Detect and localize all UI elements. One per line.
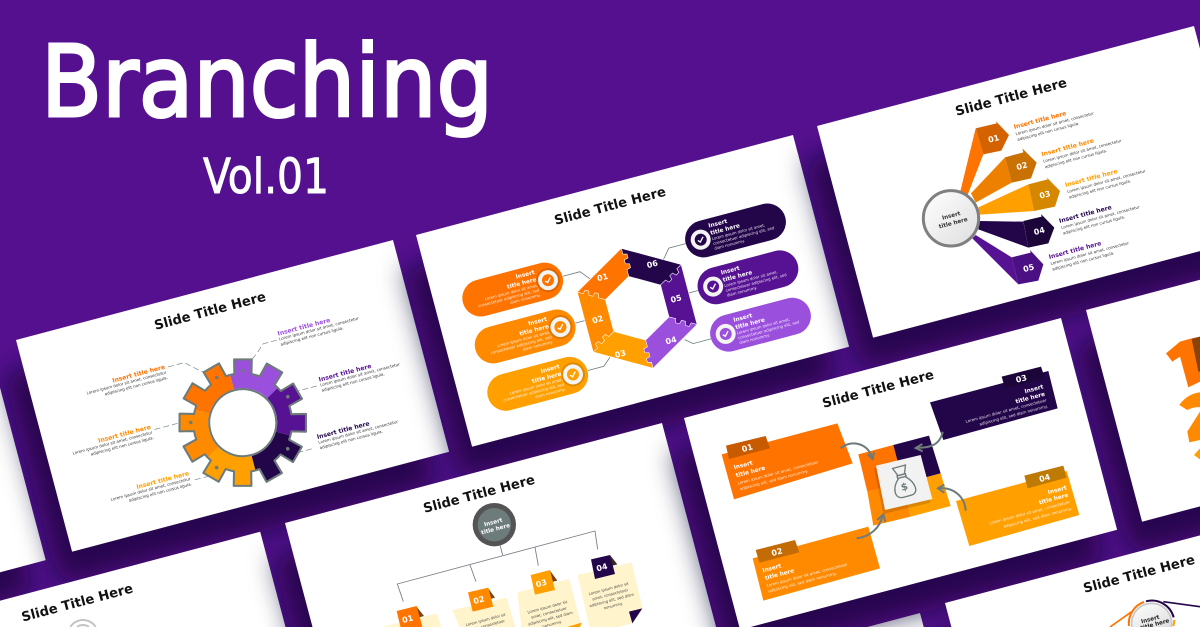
block 01: adipiscing elit, sed diam nonummy. [739, 468, 809, 491]
note 03: Lorem ipsum dolor sit [527, 599, 568, 615]
text block: gear label 6: Insert title here [316, 420, 370, 441]
block 02: 02 [770, 546, 784, 558]
heading: bottom-left slide title: Slide Title Here [20, 581, 135, 625]
centre quadrant square [858, 436, 951, 526]
text block: arrow label 4: adipiscing elit non cursus ligula. [1062, 214, 1125, 236]
pill 1 [458, 258, 567, 321]
text block: arrow label 2: Lorem ipsum dolor sit amet, consectetur [1043, 138, 1123, 164]
pill 6: diam nonummy. [714, 238, 745, 251]
hexagon numbers: 01 [596, 272, 610, 283]
org chart lines [397, 531, 598, 602]
pill 5: Lorem ipsum dolor sit amet, [724, 269, 778, 288]
text block: arrow label 3: Insert title here [1064, 168, 1118, 189]
panel: radial arrows slide [817, 26, 1200, 338]
icon: money bag [889, 464, 917, 499]
text block: gear label 1 [84, 364, 169, 401]
connector lines [563, 244, 711, 371]
panel: bottom-right slide [945, 503, 1200, 627]
icon: grey ring [70, 620, 96, 627]
pill 4: consectetuer adipiscing elit, sed [737, 319, 800, 340]
big number 2 [1179, 392, 1200, 442]
arrow 01 [960, 121, 1009, 196]
pill 2: Lorem ipsum dolor sit amet, [497, 329, 551, 348]
arrow to centre from 01 [841, 443, 874, 459]
pill 2: consectetuer adipiscing elit, sed [490, 334, 553, 355]
panel: big numbers slide (cropped) [1086, 210, 1200, 522]
pill 2: title here [519, 324, 550, 338]
pill 1: diam nonummy. [510, 292, 541, 305]
centre circle with coloured arcs [1129, 601, 1174, 627]
subtitle: Vol.01 [203, 149, 329, 205]
text block: gear label 4: Insert title here [277, 317, 331, 338]
text block: gear label 5 [318, 356, 402, 393]
note 04: adipiscing elit, sed diam [589, 591, 635, 608]
pill 4: title here [735, 318, 766, 331]
pill 6 [681, 199, 790, 262]
pill 3 [483, 353, 592, 415]
block 03 [930, 367, 1058, 440]
text block: gear label 6: adipiscing elit non cursus ligula. [319, 429, 383, 450]
note 02: 02 [472, 594, 486, 606]
pill 1: title here [507, 277, 537, 291]
panel: gear slide [16, 240, 449, 552]
note 04: nonummy. [603, 601, 623, 611]
pill 4 [706, 294, 815, 356]
text block: gear label 5: Insert title here [318, 363, 372, 384]
gear leader lines [140, 331, 332, 487]
pill 3: consectetuer adipiscing elit, sed [503, 381, 565, 403]
pill 4: Lorem ipsum dolor sit amet, [736, 317, 790, 335]
pill 1: Insert [515, 270, 536, 281]
text block: arrow label 5: Lorem ipsum dolor sit amet, consectetur [1050, 240, 1130, 266]
note 03: amet, consectetuer [530, 605, 568, 620]
arrow 03: 03 [1038, 189, 1052, 201]
pill 5: title here [722, 270, 753, 284]
panel: org chart slide [285, 423, 716, 627]
big number 1 [1166, 337, 1200, 387]
pill 6: Lorem ipsum dolor sit amet, [711, 222, 766, 241]
pill 5 [693, 246, 802, 308]
pill 1: consectetuer adipiscing elit, sed [478, 287, 540, 308]
block 03: Lorem ipsum dolor sit amet, consectetuer [965, 397, 1047, 424]
panel: money flow slide [684, 318, 1117, 627]
heading: money slide title: Slide Title Here [821, 368, 936, 412]
chart: six-part gear [146, 329, 340, 517]
heading: org chart title: Slide Title Here [422, 473, 537, 517]
heading: bottom-right slide title: Slide Title Here [1082, 553, 1197, 597]
main title: Branching [41, 25, 493, 140]
text block: gear label 3 [109, 470, 193, 507]
text block: gear label 3: Lorem ipsum dolor sit amet, consectetur [110, 476, 191, 502]
pill 3: Insert [540, 364, 561, 375]
text block: gear label 5: Lorem ipsum dolor sit amet, consectetur [320, 361, 401, 387]
text block: gear label 4: Lorem ipsum dolor sit amet, consectetur [278, 315, 360, 341]
block 04: title here [1038, 493, 1069, 506]
block 03: Insert [1024, 384, 1044, 395]
note 04: Lorem ipsum dolor sit [588, 581, 630, 596]
heading: radial slide title: Slide Title Here [954, 76, 1069, 120]
text block: arrow label 4: Lorem ipsum dolor sit amet, consectetur [1061, 204, 1141, 230]
text block: gear label 2: Lorem ipsum dolor sit amet, consectetur [72, 430, 153, 456]
block 01 [722, 423, 853, 499]
pill 4: diam nonummy. [739, 332, 770, 345]
block 01: Lorem ipsum dolor sit amet, consectetuer [737, 459, 819, 486]
note 04 [578, 555, 643, 627]
block 02: Insert [762, 563, 782, 574]
arrow to centre from 02 [857, 514, 885, 538]
arrow 02 [971, 148, 1037, 203]
block 02: title here [764, 568, 795, 582]
note 01 [383, 606, 441, 627]
pill 4: Insert [733, 313, 753, 324]
text block: gear label 6: Lorem ipsum dolor sit amet, consectetur [318, 419, 399, 445]
centre circle: title here [938, 217, 969, 230]
arrow 03 [978, 177, 1060, 215]
heading: hexagon slide title: Slide Title Here [553, 185, 668, 229]
root node [473, 503, 516, 546]
pill 5: consectetuer adipiscing elit, sed [725, 272, 788, 293]
note 03 [517, 570, 582, 627]
text block: gear label 1: Insert title here [112, 364, 166, 385]
text block: gear label 6 [316, 413, 400, 450]
root node: title here [481, 523, 511, 536]
text block: gear label 1: Lorem ipsum dolor sit amet, consectetur [86, 370, 167, 396]
block 02: adipiscing elit, sed diam nonummy. [768, 571, 837, 594]
block 03: 03 [1015, 373, 1028, 385]
note 03: adipiscing elit, sed diam [527, 610, 573, 627]
pill 3: title here [531, 371, 562, 385]
text block: gear label 4: adipiscing elit non cursus ligula. [280, 325, 344, 347]
text block: arrow label 4: Insert title here [1058, 204, 1112, 225]
note 01: 01 [401, 613, 414, 625]
hexagon numbers [581, 255, 693, 363]
arrow to centre from 03 [916, 432, 943, 451]
pill 3: diam nonummy. [535, 386, 566, 399]
panel: partial bottom-left slide [0, 532, 286, 627]
centre circle: Insert [942, 211, 962, 222]
panel: hexagon slide [416, 135, 849, 447]
note 03: 03 [535, 578, 548, 589]
text block: gear label 4 [277, 310, 361, 347]
text block: arrow label 2: Insert title here [1041, 137, 1095, 158]
text block: gear label 2 [70, 424, 155, 461]
arrow 04 [978, 214, 1054, 248]
note 04: amet, consectetuer [592, 587, 629, 601]
note 02: Lorem ipsum dolor sit [465, 612, 507, 627]
block 04: Insert [1047, 485, 1068, 496]
block 01: title here [735, 466, 766, 479]
pill 2: Insert [528, 317, 548, 328]
pill 3: Lorem ipsum dolor sit amet, [509, 377, 563, 396]
text block: arrow label 5: adipiscing elit non cursus ligula. [1052, 250, 1115, 272]
hexagon numbers: 06 [646, 259, 659, 270]
heading: gear slide title: Slide Title Here [153, 290, 268, 334]
text block: gear label 3: adipiscing elit non cursus ligula. [128, 481, 192, 503]
text block: gear label 2: Insert title here [98, 424, 152, 445]
pill 6: Insert [708, 219, 728, 230]
block 04: Lorem ipsum dolor sit amet, consectetuer [989, 499, 1071, 526]
block 04 [956, 466, 1079, 546]
hexagon numbers: 03 [614, 348, 627, 360]
text block: arrow label 2: adipiscing elit non cursus ligula. [1044, 148, 1107, 169]
pill 2 [471, 305, 580, 367]
root node: Insert [484, 518, 504, 528]
block 03: adipiscing elit, sed diam nonummy. [979, 403, 1048, 427]
block 03: title here [1015, 392, 1046, 405]
note 04: 04 [595, 562, 609, 573]
text block: gear label 2: adipiscing elit non cursus ligula. [90, 435, 154, 457]
centre circle [923, 191, 979, 246]
pill 6: title here [710, 223, 741, 237]
hexagon numbers: 04 [665, 335, 678, 346]
arrow 05 [972, 235, 1043, 284]
slide: partial far-left [0, 348, 46, 627]
arrow 02: 02 [1015, 160, 1029, 172]
text block: arrow label 3: adipiscing elit non cursus ligula. [1068, 178, 1131, 200]
text block: gear label 3: Insert title here [136, 470, 190, 491]
arrow 01: 01 [987, 133, 1000, 145]
pill 5: Insert [720, 266, 741, 276]
block 04: adipiscing elit, sed diam nonummy. [1003, 506, 1072, 529]
text block: gear label 1: adipiscing elit non cursus ligula. [104, 375, 168, 396]
chart: puzzle hexagon [539, 213, 735, 404]
pill 6: consectetuer adipiscing elit, sed [712, 225, 775, 246]
hexagon numbers: 05 [670, 293, 683, 305]
block 02: Lorem ipsum dolor sit amet, consectetuer [766, 561, 848, 588]
text block: arrow label 1: adipiscing elit non cursus ligula. [1017, 121, 1080, 142]
block 02 [753, 527, 880, 601]
block 04: 04 [1038, 472, 1052, 484]
text block: arrow label 1: Lorem ipsum dolor sit amet, consectetur [1015, 110, 1095, 136]
text block: gear label 5: adipiscing elit non cursus ligula. [321, 371, 385, 393]
note 02 [452, 588, 515, 627]
text block: arrow label 5: Insert title here [1048, 240, 1102, 261]
pill 1: Lorem ipsum dolor sit amet, [484, 283, 539, 301]
block 01: Insert [733, 460, 754, 471]
pill 2: diam nonummy. [522, 339, 554, 352]
text block: arrow label 1: Insert title here [1013, 110, 1067, 131]
pill 5: diam nonummy. [726, 285, 758, 298]
icon: money bag: $ [900, 481, 909, 494]
arrow to centre from 04 [938, 485, 966, 511]
big number 3 [1194, 448, 1200, 459]
centre circle with coloured arcs: Insert [1141, 615, 1161, 625]
arrow 04: 04 [1033, 225, 1046, 237]
panel: cropped lower slide [867, 613, 924, 627]
text block: arrow label 3: Lorem ipsum dolor sit amet, consectetur [1067, 168, 1147, 194]
arrow 05: 05 [1022, 262, 1035, 274]
diagram lines [1110, 602, 1200, 627]
hexagon numbers: 02 [591, 314, 604, 326]
block 01: 01 [741, 442, 754, 454]
